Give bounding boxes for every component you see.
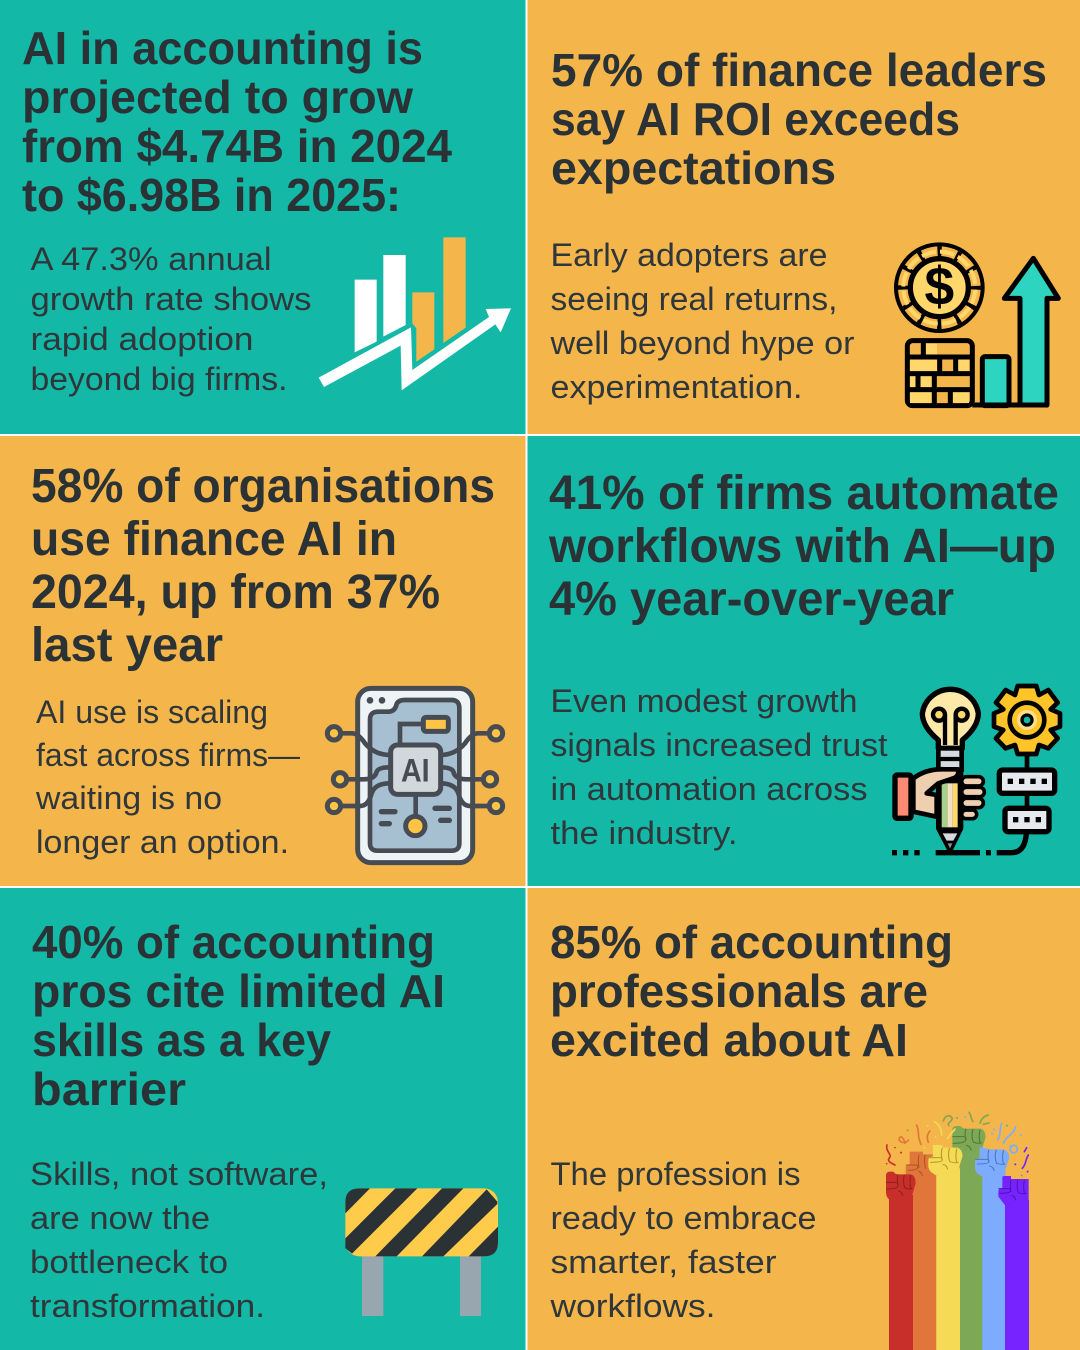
heading: skills barrier: skills as a key [32, 1014, 331, 1066]
text: ROI body [549, 237, 855, 405]
text: market growth body: rapid adoption [30, 321, 254, 357]
icon: growth chart with arrow [319, 237, 511, 390]
icon: rainbow raised fists [886, 1112, 1029, 1350]
heading: automation [548, 467, 1059, 626]
icon: striped road barrier [345, 1188, 498, 1316]
text: excitement body: workflows. [549, 1288, 716, 1324]
heading: market growth: AI in accounting is [22, 22, 423, 74]
text: ROI body: well beyond hype or [549, 325, 855, 361]
text: adoption body: fast across firms— [36, 737, 300, 773]
text: market growth body: A 47.3% annual [30, 241, 272, 277]
heading: skills barrier: pros cite limited AI [32, 965, 445, 1017]
text: skills barrier body [30, 1156, 328, 1324]
heading: adoption [31, 460, 495, 672]
text: adoption body [35, 694, 300, 860]
icon: coin, bricks and rising arrow: $ [924, 257, 954, 316]
panel: market growth [0, 0, 526, 434]
text: ROI body: Early adopters are [550, 237, 828, 273]
heading: excitement: professionals are [550, 965, 928, 1017]
text: adoption body: waiting is no [35, 780, 222, 816]
heading: ROI: say AI ROI exceeds [551, 93, 960, 145]
heading: automation: 41% of firms automate [549, 467, 1059, 520]
icon: AI chip on device: AI [401, 753, 430, 789]
text: automation body: signals increased trust [550, 727, 888, 763]
heading: ROI [551, 44, 1047, 194]
text: skills barrier body: transformation. [30, 1288, 265, 1324]
heading: market growth [22, 22, 452, 221]
text: automation body: Even modest growth [550, 683, 858, 719]
panel: adoption [0, 436, 526, 886]
text: skills barrier body: bottleneck to [30, 1244, 228, 1280]
heading: market growth: projected to grow [22, 71, 413, 123]
text: market growth body [30, 241, 312, 397]
heading: market growth: from $4.74B in 2024 [22, 120, 452, 172]
text: automation body [550, 683, 888, 851]
text: adoption body: AI use is scaling [36, 694, 268, 730]
text: ROI body: experimentation. [550, 369, 802, 405]
text: ROI body: seeing real returns, [550, 281, 838, 317]
heading: skills barrier [32, 916, 445, 1115]
heading: adoption: 2024, up from 37% [31, 566, 440, 619]
text: automation body: in automation across [550, 771, 868, 807]
text: skills barrier body: are now the [30, 1200, 210, 1236]
heading: excitement: excited about AI [550, 1014, 908, 1066]
heading: excitement [550, 916, 953, 1066]
heading: automation: 4% year-over-year [549, 573, 954, 626]
text: excitement body: ready to embrace [550, 1200, 816, 1236]
heading: adoption: use finance AI in [31, 513, 397, 566]
icon: AI chip on device [327, 688, 503, 863]
text: excitement body: smarter, faster [550, 1244, 777, 1280]
heading: ROI: 57% of finance leaders [551, 44, 1047, 96]
heading: market growth: to $6.98B in 2025: [22, 169, 401, 221]
heading: adoption: 58% of organisations [31, 460, 495, 513]
panel: automation [528, 436, 1080, 886]
text: market growth body: growth rate shows [30, 281, 312, 317]
text: adoption body: longer an option. [36, 824, 289, 860]
heading: excitement: 85% of accounting [550, 916, 953, 968]
text: automation body: the industry. [550, 815, 738, 851]
text: market growth body: beyond big firms. [30, 361, 288, 397]
text: excitement body: The profession is [550, 1156, 800, 1192]
heading: adoption: last year [31, 619, 223, 672]
heading: skills barrier: 40% of accounting [32, 916, 435, 968]
heading: skills barrier: barrier [32, 1063, 186, 1115]
text: excitement body [549, 1156, 816, 1324]
panel: ROI [528, 0, 1080, 434]
panel: excitement [528, 888, 1080, 1350]
heading: automation: workflows with AI—up [548, 520, 1056, 573]
icon: coin, bricks and rising arrow [897, 245, 1058, 406]
text: skills barrier body: Skills, not software, [30, 1156, 328, 1192]
heading: ROI: expectations [551, 142, 836, 194]
icon: lightbulb, pencil, hand and gear [892, 686, 1060, 853]
panel: skills barrier [0, 888, 526, 1350]
